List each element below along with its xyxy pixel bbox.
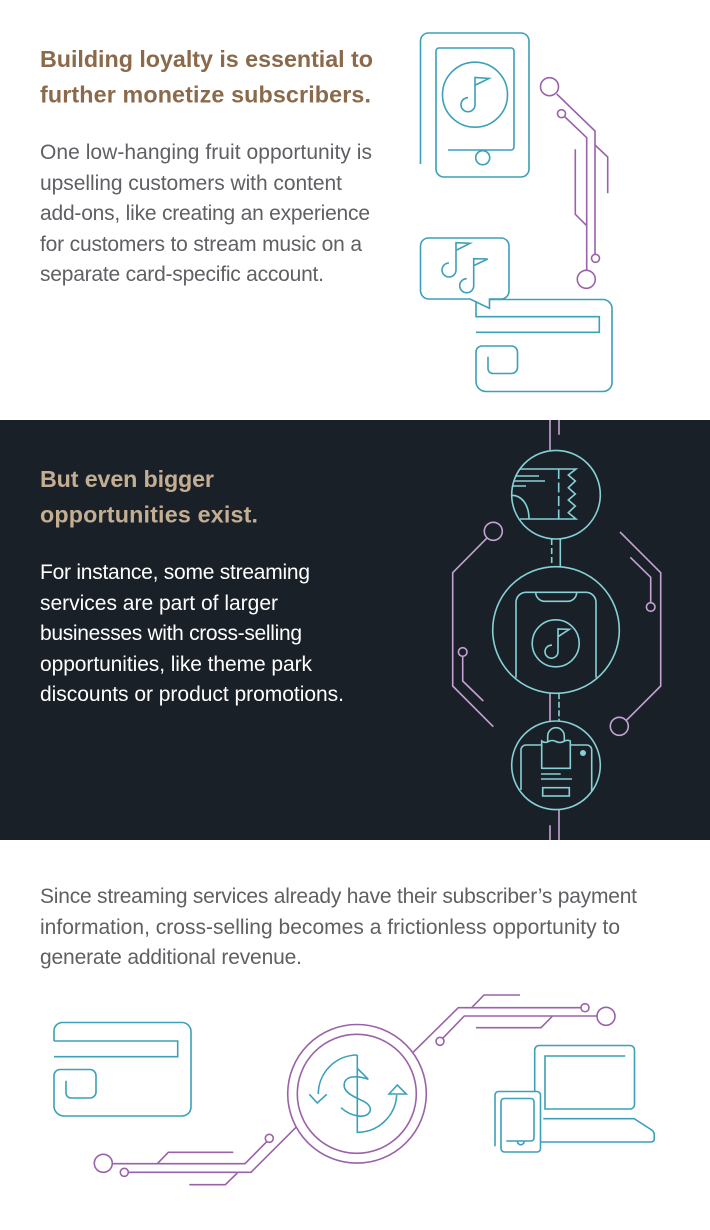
icon: circuit lines (540, 78, 608, 288)
text block: cross-selling: For instance, some streaming (40, 561, 310, 584)
icon: phone with music note (493, 567, 619, 693)
icon: credit card (476, 300, 612, 392)
text block: frictionless cross-selling: Since streaming services already have their subscriber’s payment (40, 885, 637, 908)
text block: upselling: upselling customers with content (40, 172, 342, 195)
text block: upselling: for customers to stream music on a (40, 233, 362, 256)
icon: bottom-left circuit (94, 1127, 296, 1185)
panel: bigger opportunities (0, 420, 710, 840)
heading: bigger opportunities: But even bigger (40, 466, 214, 492)
text block: upselling (40, 141, 372, 286)
icon: top-right circuit (413, 995, 615, 1053)
text block: frictionless cross-selling (40, 885, 637, 969)
icon: side circuits (453, 420, 661, 840)
icon: ticket circle (512, 450, 600, 539)
heading: bigger opportunities (40, 466, 258, 528)
icon: coin with dollar and arrows (288, 1024, 426, 1163)
text block: cross-selling: businesses with cross-selling (40, 622, 302, 645)
text block: cross-selling: discounts or product promotions. (40, 683, 344, 706)
text block: frictionless cross-selling: generate additional revenue. (40, 946, 302, 969)
heading: building loyalty: further monetize subscribers. (40, 82, 371, 108)
text block: upselling: One low-hanging fruit opportunity is (40, 141, 372, 164)
text block: cross-selling: services are part of larger (40, 592, 278, 615)
heading: bigger opportunities: opportunities exist. (40, 502, 258, 528)
icon: connectors (552, 539, 560, 721)
text block: frictionless cross-selling: information, cross-selling becomes a frictionless opportunity to (40, 916, 620, 939)
icon: credit card bottom (54, 1022, 191, 1116)
text block: cross-selling (40, 561, 344, 706)
panel: loyalty section (0, 0, 710, 420)
icon: shopping circle (512, 721, 600, 810)
text block: cross-selling: opportunities, like theme park (40, 653, 312, 676)
icon: tablet with music note (420, 33, 529, 177)
icon: speech bubble with notes (420, 238, 509, 308)
heading: building loyalty: Building loyalty is essential to (40, 46, 373, 72)
text block: upselling: separate card-specific account. (40, 263, 324, 286)
icon: laptop and tablet (495, 1046, 654, 1152)
heading: building loyalty (40, 46, 373, 108)
text block: upselling: add-ons, like creating an experience (40, 202, 370, 225)
